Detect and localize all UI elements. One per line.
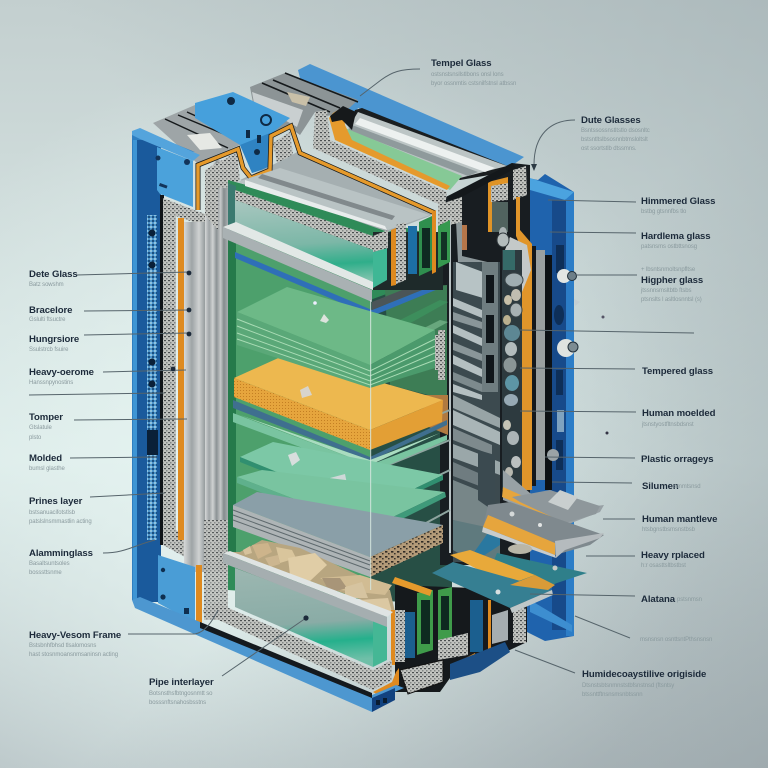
bottom blue base [132,597,404,712]
callout: Silumen: smmtsnsd [674,484,701,490]
callout: Tomper [29,412,187,441]
callout: Heavy-Vesom Frame: Bstsbnhfbhsd tlsalomosns [29,643,96,649]
bottom left blue plate [158,555,202,625]
callout: Heavy rplaced [586,550,705,569]
green back wall [228,180,452,605]
glass front edge line [370,300,371,590]
callout: Pipe interlayer: bosssnftsnahosbsstns [149,700,206,706]
callout: Humidecoaystilive origiside [515,650,706,698]
callout: Hungrsiore: Ssulstrcb fsuire [29,347,69,353]
callout: Pipe interlayer: Pipe interlayer [149,677,214,688]
callout: small caption [575,616,712,643]
callout: Heavy-oerome: Heavy-oerome [29,367,94,378]
leader line: unlabeled [29,393,165,395]
callout: Hardlema glass [550,231,711,250]
callout: Higpher glass: Higpher glass [641,275,703,286]
callout: Heavy-Vesom Frame: hast stosnmoansnmsaninsn acting [29,652,118,658]
leader line: long unlabeled [520,330,694,333]
callout: Alatana: Alatana [641,594,676,605]
grey stone slab [233,492,443,577]
callout: Bracelore [29,305,191,323]
callout: Himmered Glass [548,196,715,215]
callout: Tempered glass: Tempered glass [642,366,713,377]
callout: Higpher glass: + lbsntsnmoltsnpfltse [641,267,696,273]
callout: Hungrsiore [29,332,191,353]
callout: Heavy-Vesom Frame [29,610,218,658]
callout: Alamminglass [29,540,155,576]
right blue frame [527,174,574,641]
left hatched gasket [163,198,205,568]
green slab [237,287,442,388]
callout: Alamminglass: Alamminglass [29,548,93,559]
callout: Bracelore: Bracelore [29,305,72,316]
yellow slab [234,355,443,450]
callout: Silumen [552,481,701,492]
callout: Dute Glasses [531,115,650,171]
callout: Himmered Glass: Himmered Glass [641,196,715,207]
callout: Hungrsiore: Hungrsiore [29,334,79,345]
callout: Prines layer [29,493,165,525]
callout: Molded: bumsl glasthe [29,466,65,472]
callout: Prines layer: patslslnsmmastlin acting [29,519,92,525]
callout: Higpher glass: jtssnnsmsltbtb ftsbs [640,288,691,294]
rocks [230,540,395,612]
upper curved yellow slab with debris [482,470,604,558]
callout: Tempered Glass top: Tempel Glass [431,58,491,69]
callout: Tomper: Gtslatule [29,425,53,431]
top back layers [240,106,516,232]
callout: Humidecoaystilive origiside: btssnttftnsnsmsnbtssnn [582,692,642,698]
callout: Molded: Molded [29,453,62,464]
callout: Heavy rplaced: h:r osasttsltbstbst [641,563,686,569]
callout: Dute Glasses: bstsntltslbsosnnbtmsloltslt [581,137,648,143]
callout: small caption: msnsnsn osnttsntPthsnsnsn [640,637,712,643]
back fins behind top [153,73,358,163]
mint plate two with debris [240,442,443,514]
middle blue bracket [195,92,290,173]
callout: Tempered Glass top: byor ossnmtis cstsnilfstnsl atbssn [431,81,516,87]
callout: Human mantleve [603,514,717,533]
callout: Tomper: plsto [29,435,42,441]
callout: Alatana: pstsnmsn [677,597,702,603]
callout: Alamminglass: bosssttsnme [29,570,62,576]
left blue frame [132,128,200,602]
callout: Heavy rplaced: Heavy rplaced [641,550,705,561]
callout: Humidecoaystilive origiside: Dtsnstsbtsnmnststbfsnstnsd (ftsntsy [582,683,674,689]
callout: Tempered Glass top: ostsnstsnsllstlbons onsl lons [431,72,504,78]
callout: Dete Glass: Batz sowshm [29,282,64,288]
callout: Himmered Glass: bstbg gtsnnfbs tlo [641,209,687,215]
callout: Human moelded: jtsnstyostfltnsbdsnst [641,422,694,428]
mint plate one [233,413,447,473]
callouts right [360,58,717,698]
callout: Alamminglass: Basaltsuntsoles [29,561,70,567]
bottom hatched band [203,603,399,696]
callout: Prines layer: bstsanuacifotstlsb [29,510,76,516]
callout: Heavy-oerome: Hanssnpynostins [29,380,73,386]
panel: window frame cross-section [132,64,608,712]
top unit cut face [373,210,450,290]
callout: Higpher glass [575,267,703,303]
right bottom section [391,577,527,694]
callout: Human moelded: Human moelded [642,408,716,419]
callout: Dete Glass: Dete Glass [29,269,78,280]
grey fin stack [449,218,500,562]
callout: Pipe interlayer: Botsnsthsfbtngosnmtt so [149,691,213,697]
callout: Dute Glasses: ost ssortstlb dtssmns. [581,146,637,152]
callout: Dete Glass [29,269,191,288]
left orange strip [178,218,184,540]
callout: Prines layer: Prines layer [29,496,83,507]
callout: Dute Glasses: Bsntssossnstltstlo dsosnltc [581,128,650,134]
callout: Molded [29,453,157,472]
callout: Hardlema glass: Hardlema glass [641,231,711,242]
callout: Bracelore: Gslulti ftsuctre [29,317,66,323]
thin blue plate [233,400,447,461]
callout: Human mantleve: htsbgnstbsmsnstbsb [642,527,696,533]
left grey columns [184,132,293,620]
callout: Alatana [530,594,702,605]
right section block [440,163,552,565]
top blue strip [298,64,524,167]
callout: Human mantleve: Human mantleve [642,514,717,525]
callout: Tempered Glass top [360,58,516,96]
lower plates [432,544,587,613]
callout: Hardlema glass: patsnsms ostbttsnosg [641,244,697,250]
callout: Human moelded [520,408,716,428]
callout: Dute Glasses: Dute Glasses [581,115,641,126]
rock column [497,227,523,477]
callout: Humidecoaystilive origiside: Humidecoaystilive origiside [582,669,706,680]
callout: Plastic orrageys: Plastic orrageys [641,454,714,465]
right bolts [547,269,608,461]
callout: Heavy-oerome [29,367,186,386]
callout: Heavy-Vesom Frame: Heavy-Vesom Frame [29,630,121,641]
callout: Higpher glass: ptsnslts l asltlosnntsl (s) [641,297,702,303]
orange top profile [198,126,435,213]
mint plate three [237,470,446,535]
callouts left [29,269,309,706]
callout: Silumen: Silumen [642,481,679,492]
green shelf section behind plates [376,285,450,550]
callout: Tomper: Tomper [29,412,63,423]
top glass unit [223,168,443,316]
bottom glass unit [223,551,393,667]
callout: Pipe interlayer [149,615,309,706]
